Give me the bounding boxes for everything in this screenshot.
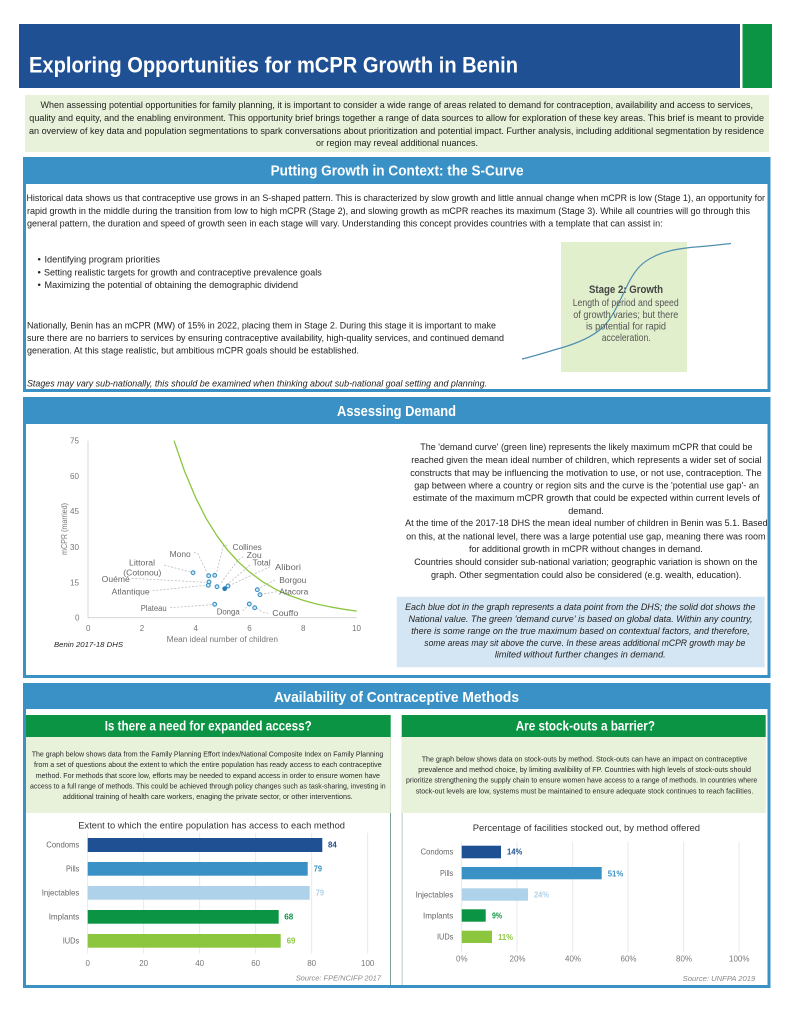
- callout: how to read the graph: National value. The green 'demand curve' is based on global data. Within any country,: [408, 614, 752, 625]
- x axis ticks: 100: [361, 959, 375, 968]
- text block: demand curve explanation: graph. Other segmentation could also be considered (e.g. wealth, education).: [431, 570, 741, 581]
- bar: injectables: 24%: [534, 890, 550, 899]
- intro text block: [25, 95, 769, 152]
- text block: demand curve explanation: [405, 442, 768, 581]
- region labels: Plateau: [141, 604, 167, 613]
- bar: condoms: Condoms: [421, 848, 453, 856]
- bar: implants: Implants: [49, 912, 79, 922]
- bar: condoms: Condoms: [46, 840, 79, 850]
- text block: demand curve explanation: reached given the mean ideal number of children, which represents a wider set of social: [411, 455, 762, 466]
- x axis labels: [86, 624, 362, 644]
- leader lines: [132, 545, 277, 613]
- x axis ticks: 20: [139, 959, 149, 968]
- bar: injectables: [416, 888, 550, 901]
- x axis ticks: 20%: [510, 954, 526, 964]
- text block: stock-outs: stock-out levels are low, systems must be maintained to ensure adequate stock continues to reach facilities.: [416, 786, 753, 796]
- bar: condoms: 84: [328, 841, 337, 850]
- y axis labels: mCPR (married): [60, 503, 69, 555]
- region labels: Alibori: [275, 563, 301, 572]
- intro text block: When assessing potential opportunities for family planning, it is important to consider a wide range of areas related to demand for contraception, availability and access to services,: [40, 100, 753, 111]
- S-curve diagram: acceleration.: [602, 333, 651, 344]
- heading: availability: Availability of Contraceptive Methods: [274, 689, 519, 706]
- y axis labels: 60: [70, 472, 80, 481]
- x axis ticks: 60%: [620, 954, 637, 964]
- bullet list: Identifying program priorities: [44, 254, 160, 266]
- S-curve diagram: Stage 2: Growth: [589, 284, 663, 296]
- bar: pills: [440, 867, 624, 879]
- text block: stock-outs: [406, 754, 757, 796]
- text block: demand curve explanation: The 'demand curve' (green line) represents the likely maximum mCPR that could be: [420, 442, 752, 453]
- text block: S-curve explanation: [26, 193, 766, 230]
- bar: injectables: Injectables: [42, 888, 79, 898]
- region labels: Total: [253, 558, 271, 568]
- bar: IUDs: [437, 931, 514, 943]
- y axis labels: 30: [70, 543, 80, 552]
- y axis labels: [60, 436, 80, 622]
- region labels: Mono: [170, 550, 191, 559]
- bar: pills: [66, 862, 322, 876]
- x axis ticks: 0%: [456, 954, 468, 964]
- x axis labels: 6: [247, 624, 252, 633]
- S-curve diagram: is potential for rapid: [586, 322, 666, 332]
- x axis labels: 10: [352, 624, 362, 633]
- region labels: [102, 543, 309, 618]
- bar: implants: [423, 909, 503, 922]
- text block: expanded access: method. For methods that score low, efforts may be needed to expand access in order to ensure women have: [36, 771, 380, 780]
- bar: implants: Implants: [423, 911, 453, 920]
- region labels: Couffo: [272, 609, 299, 618]
- source: Source: FPE/NCIFP 2017: [296, 974, 382, 982]
- bar: injectables: 79: [316, 888, 324, 898]
- text block: stock-outs: prioritize strengthening the supply chain to ensure women have access to a range of methods. In countries where: [406, 776, 757, 784]
- callout: how to read the graph: [397, 597, 765, 667]
- x axis ticks: 40: [195, 959, 205, 968]
- sub-heading: expanded access: Is there a need for expanded access?: [105, 718, 312, 734]
- text block: Benin national stage: [27, 320, 504, 356]
- bar: implants: 68: [284, 912, 294, 922]
- bar chart: access by method: [42, 820, 382, 982]
- callout: how to read the graph: there is some range on the true maximum based on contextual factors, and therefore,: [411, 626, 750, 637]
- data points: [191, 571, 262, 610]
- text block: demand curve explanation: At the time of the 2017-18 DHS the mean ideal number of children in Benin was 5.1. Based: [405, 518, 768, 529]
- region labels: Ouémé: [102, 575, 130, 584]
- bar: condoms: [46, 838, 337, 852]
- text block: demand curve explanation: for additional growth in mCPR without changes in demand.: [469, 544, 703, 555]
- title: Exploring Opportunities for mCPR Growth in Benin: [29, 52, 518, 78]
- text block: Benin national stage: sure there are no barriers to services by ensuring contraceptive availability, high-quality services, and continued demand: [27, 333, 504, 344]
- heading: S-curve: Putting Growth in Context: the S-Curve: [271, 162, 524, 180]
- bar: IUDs: 69: [287, 936, 296, 946]
- x axis ticks: 80: [307, 959, 317, 968]
- text block: expanded access: [30, 750, 386, 801]
- x axis ticks: 100%: [729, 954, 749, 964]
- intro text block: an overview of key data and population segmentations to spark conversations about prioritization and potential impact. Further analysis, including additional segmentation by residence: [29, 126, 764, 137]
- title banner: [19, 24, 772, 88]
- bullet list: Setting realistic targets for growth and contraceptive prevalence goals: [44, 268, 322, 278]
- region labels: Zou: [247, 551, 262, 560]
- text block: demand curve explanation: Countries should consider sub-national variation; geographic variation is shown on the: [414, 557, 758, 568]
- S-curve diagram: Length of period and speed: [573, 298, 679, 309]
- x axis ticks: 0: [86, 959, 90, 968]
- text block: expanded access: The graph below shows data from the Family Planning Effort Index/National Composite Index on Family Planning: [32, 750, 383, 758]
- bar: pills: 79: [314, 864, 322, 874]
- y axis labels: 15: [70, 578, 80, 588]
- note: sub-national stages: Stages may vary sub-nationally, this should be examined when thinking about sub-national goal setting and planning.: [27, 378, 487, 390]
- bar: implants: [49, 910, 294, 924]
- text block: demand curve explanation: on this, at the national level, there was a large potential use gap, meaning there was room: [406, 532, 766, 542]
- region labels: Atlantique: [112, 588, 150, 596]
- bar: IUDs: IUDs: [63, 936, 79, 946]
- chart source note: Benin 2017-18 DHS: [54, 642, 123, 649]
- x axis labels: 0: [86, 624, 91, 633]
- region labels: Atacora: [279, 588, 309, 596]
- sub-panel: expanded access: [26, 715, 391, 985]
- text block: S-curve explanation: rapid growth in the middle during the transition from low to high mCPR (Stage 2), and slowing growth as mCPR reaches its maximum (Stage 3). While all countries will go through this: [27, 206, 750, 217]
- text block: demand curve explanation: constructs that may be influencing the motivation to use, or not use, contraception. The: [410, 468, 762, 479]
- source: Source: UNFPA 2019: [683, 974, 756, 983]
- bar: condoms: 14%: [507, 848, 523, 857]
- bar: implants: 9%: [492, 911, 503, 920]
- y axis labels: 75: [70, 436, 80, 446]
- sub-heading: stock-outs: Are stock-outs a barrier?: [516, 718, 655, 734]
- bar chart: access by method: Extent to which the entire population has access to each method: [78, 820, 345, 832]
- bar: pills: Pills: [66, 864, 79, 874]
- text block: expanded access: additional training of health care workers, enaging the private sector, or other interventions.: [63, 792, 353, 801]
- text block: S-curve explanation: general pattern, the duration and speed of growth seen in each stage will vary. Understanding this concept provides countries with a template that can assist in:: [27, 218, 663, 230]
- heading: assessing demand: Assessing Demand: [337, 403, 456, 420]
- region labels: Borgou: [279, 576, 306, 585]
- y axis labels: 45: [70, 507, 80, 516]
- x axis labels: 4: [194, 624, 198, 633]
- scatter chart: demand curve: [54, 436, 362, 649]
- bullet list: •: [38, 268, 41, 278]
- bullet list: •: [38, 254, 41, 266]
- text block: demand curve explanation: estimate of the maximum mCPR growth that could be expected within current levels of: [413, 493, 760, 504]
- text block: expanded access: access to a full range of methods. This could be achieved through policy changes such as task-sharing, investing in: [30, 782, 386, 790]
- bar: IUDs: [63, 934, 296, 948]
- x axis ticks: [456, 954, 749, 964]
- panel: assessing demand: [23, 397, 770, 678]
- region labels: Littoral: [129, 558, 155, 568]
- text block: demand curve explanation: gap between where a country or region sits and the curve is the 'potential use gap'- an: [414, 480, 759, 492]
- intro text block: quality and equity, and the enabling environment. This opportunity brief brings together a range of data sources to allow for exploration of these key areas. This brief is meant to provide: [29, 113, 764, 124]
- bar chart: stock-outs by method: [416, 823, 756, 983]
- sub-panel: stock-outs: [402, 715, 766, 985]
- text block: stock-outs: The graph below shows data on stock-outs by method. Stock-outs can have an impact on contraceptive: [422, 754, 747, 764]
- bar: IUDs: 11%: [498, 933, 514, 942]
- y axis labels: 0: [75, 614, 80, 622]
- bar chart: stock-outs by method: Percentage of facilities stocked out, by method offered: [473, 823, 700, 834]
- x axis ticks: 40%: [565, 954, 581, 964]
- callout: how to read the graph: limited without further changes in demand.: [495, 650, 666, 660]
- bullet list: [38, 254, 322, 291]
- region labels: Donga: [217, 608, 240, 616]
- x axis labels: 8: [301, 624, 306, 633]
- bar: pills: 51%: [608, 869, 624, 878]
- text block: Benin national stage: Nationally, Benin has an mCPR (MW) of 15% in 2022, placing them in Stage 2. During this stage it is important to make: [27, 320, 496, 332]
- x axis ticks: 80%: [676, 954, 692, 964]
- bar: IUDs: IUDs: [437, 933, 453, 942]
- text block: expanded access: from a set of questions about the extent to which the entire population has ready access to each contraceptive: [34, 760, 382, 769]
- callout: how to read the graph: some areas may sit above the curve. In these areas additional mCPR growth may be: [424, 638, 745, 649]
- x axis ticks: 60: [251, 959, 261, 968]
- S-curve diagram: of growth varies; but there: [573, 310, 679, 321]
- text block: stock-outs: prevalence and method choice, by limiting avalibility of FP. Countries with high levels of stock-outs should: [418, 765, 751, 774]
- bar: condoms: [421, 846, 523, 858]
- bar: injectables: [42, 886, 324, 900]
- bullet list: Maximizing the potential of obtaining the demographic dividend: [44, 280, 298, 291]
- panel: availability of contraceptive methods: [23, 683, 770, 988]
- bar: injectables: Injectables: [416, 890, 453, 899]
- panel: S-curve context: [23, 157, 770, 392]
- demand curve: [174, 441, 357, 611]
- text block: Benin national stage: generation. At this stage realistic, but ambitious mCPR goals should be established.: [27, 346, 359, 356]
- callout: how to read the graph: Each blue dot in the graph represents a data point from the DHS; the solid dot shows the: [405, 602, 756, 613]
- x axis ticks: [86, 959, 375, 968]
- region labels: Collines: [233, 543, 262, 552]
- intro text block: or region may reveal additional nuances.: [316, 138, 478, 149]
- text block: demand curve explanation: demand.: [568, 506, 604, 517]
- S-curve diagram: [522, 242, 731, 372]
- bullet list: •: [38, 280, 41, 291]
- bar: pills: Pills: [440, 869, 453, 878]
- x axis labels: Mean ideal number of children: [167, 635, 278, 644]
- x axis labels: 2: [140, 624, 145, 633]
- region labels: (Cotonou): [123, 568, 162, 578]
